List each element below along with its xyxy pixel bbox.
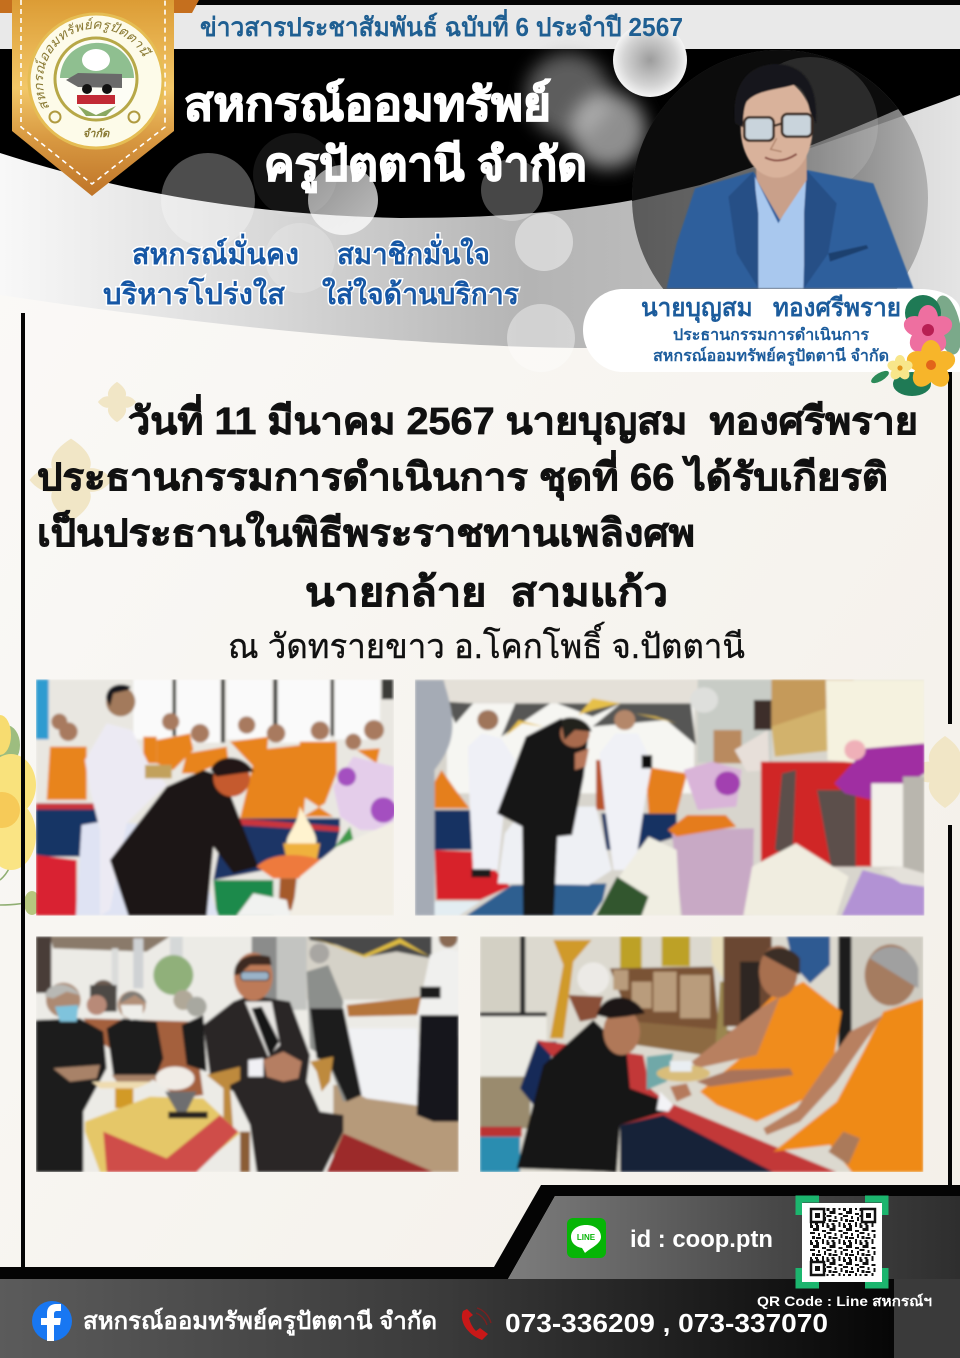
photo 4: presenting offering to monks: [480, 936, 923, 1172]
right footer block: [894, 1279, 960, 1358]
qr code: [799, 1199, 885, 1285]
slogans: สมาชิกมั่นใจ: [337, 233, 490, 271]
icon: LINE: [567, 1218, 606, 1258]
top newsletter line: ข่าวสารประชาสัมพันธ์ ฉบับที่ 6 ประจำปี 2567: [200, 8, 683, 42]
decoration: yellow flowers at left edge: [0, 715, 40, 915]
tropical flowers: [869, 293, 960, 396]
slogans: [103, 233, 519, 311]
footer contact bar: [0, 1279, 894, 1358]
title: สหกรณ์ออมทรัพย์: [184, 78, 551, 130]
left vertical rule: [21, 313, 25, 1269]
bottom black diagonal band: [0, 1185, 960, 1279]
icon: facebook: [32, 1301, 72, 1341]
portrait of chairman: [667, 64, 913, 288]
photo 1: offering flame ceremony: [36, 679, 396, 916]
slogans: บริหารโปร่งใส: [103, 276, 285, 311]
slogans: สหกรณ์มั่นคง: [132, 233, 299, 271]
photo 2: chairman paying respect: [415, 679, 924, 916]
line contact panel: [508, 1196, 960, 1358]
portrait backdrop circle: [632, 50, 928, 289]
gold ribbon with logo: [0, 0, 199, 196]
header: bokeh circles: [161, 23, 687, 372]
icon: telephone: [462, 1308, 491, 1340]
header: top strip: [0, 0, 960, 49]
line id: id : coop.ptn: [630, 1226, 773, 1253]
photo 3: seated chairman at funeral: [36, 929, 459, 1172]
logo: สหกรณ์ออมทรัพย์ครูปัตตานี: [35, 17, 153, 109]
logo: [28, 12, 164, 150]
facebook page name: สหกรณ์ออมทรัพย์ครูปัตตานี จำกัด: [83, 1307, 437, 1336]
main announcement text: [37, 394, 918, 666]
main announcement text: นายกล้าย สามแก้ว: [305, 571, 668, 615]
position: ประธานกรรมการดำเนินการ: [673, 326, 869, 344]
name: นายบุญสม ทองศรีพราย: [641, 294, 901, 324]
main announcement text: ประธานกรรมการดำเนินการ ชุดที่ 66 ได้รับเกียรติ: [37, 450, 888, 501]
name plate: [583, 289, 960, 372]
phone numbers: 073-336209 , 073-337070: [505, 1308, 828, 1338]
icon: LINE: LINE: [577, 1233, 596, 1242]
qr caption: QR Code : Line สหกรณ์ฯ: [757, 1293, 932, 1309]
main announcement text: ณ วัดทรายขาว อ.โคกโพธิ์ จ.ปัตตานี: [228, 621, 745, 666]
main announcement text: เป็นประธานในพิธีพระราชทานเพลิงศพ: [37, 510, 695, 555]
header: black wave: [0, 49, 960, 218]
logo: จำกัด: [83, 127, 110, 140]
main announcement text: วันที่ 11 มีนาคม 2567 นายบุญสม ทองศรีพราย: [128, 394, 918, 445]
right vertical rule: [948, 358, 952, 1187]
decoration: thai ornaments: [30, 382, 960, 808]
organisation: สหกรณ์ออมทรัพย์ครูปัตตานี จำกัด: [653, 346, 889, 367]
header: grey swoosh: [0, 49, 960, 348]
title: [184, 78, 587, 193]
slogans: ใส่ใจด้านบริการ: [322, 277, 519, 311]
title: ครูปัตตานี จำกัด: [264, 138, 587, 193]
